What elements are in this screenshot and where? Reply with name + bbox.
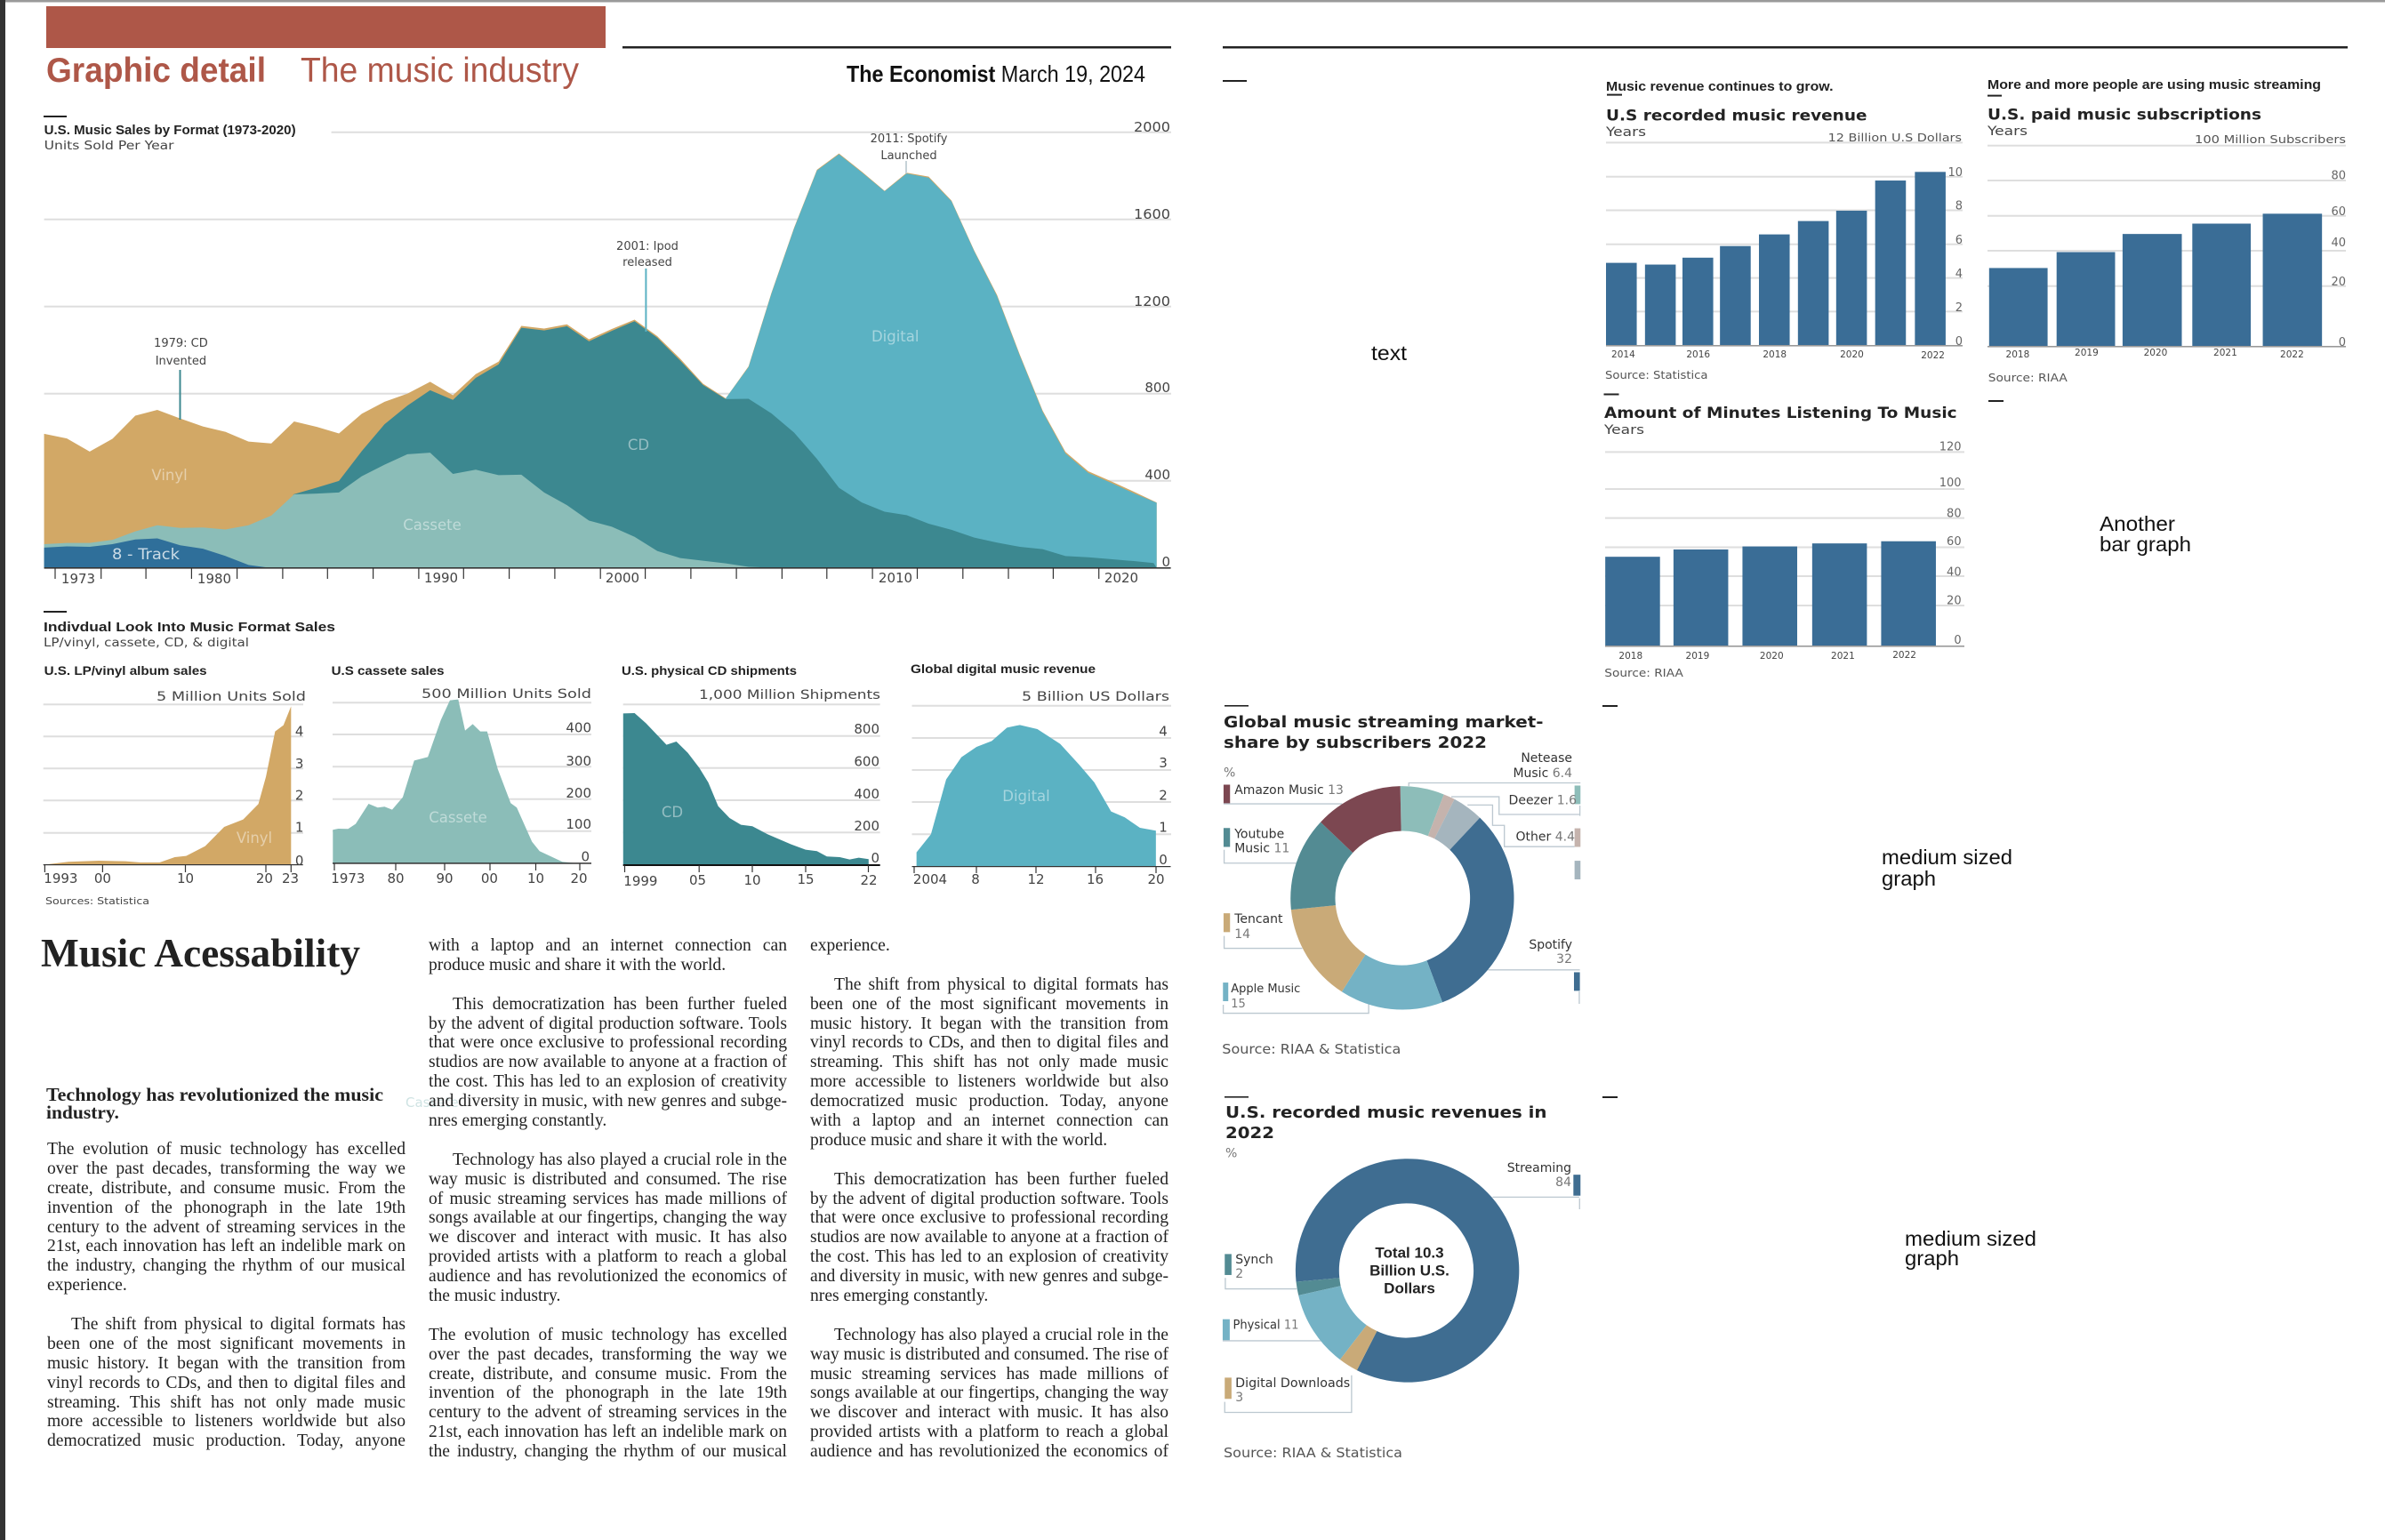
panel: US recorded music revenue bars: 12 Billion U.S Dollars <box>1828 131 1962 144</box>
center total <box>1369 1245 1449 1296</box>
y axis labels: 1600 <box>1134 206 1170 222</box>
chart: CD shipments: U.S. physical CD shipments <box>622 663 797 678</box>
panel: US recorded music revenue bars: 2016 <box>1686 349 1710 360</box>
kicker: Music revenue continues to grow. <box>1606 79 1834 94</box>
article column 2: by the advent of digital production software. Tools <box>429 1015 787 1033</box>
article column 2: we discover and interact with music. It has also <box>429 1228 787 1247</box>
annotation: Spotify launched: Launched <box>880 149 937 163</box>
article subheading: industry. <box>46 1102 119 1123</box>
chart: vinyl sales: 00 <box>94 870 111 886</box>
panel: US paid subscriptions bars: 80 <box>2331 170 2346 183</box>
legend labels: 15 <box>1231 998 1246 1011</box>
article column 1: experience. <box>47 1276 127 1295</box>
article column 3: the cost. This has led to an explosion of creativity <box>810 1247 1168 1266</box>
chart: digital revenue: 8 <box>971 871 980 887</box>
chart: CD shipments: 05 <box>689 872 706 888</box>
annotation: CD invented <box>154 337 208 420</box>
chart: vinyl sales: Vinyl <box>237 830 272 846</box>
article column 3: songs available at our fingertips, changing the way <box>810 1384 1168 1402</box>
article column 1: the industry, changing the rhythm of our musical <box>47 1256 406 1275</box>
legend labels: Music 6.4 <box>1513 766 1572 781</box>
annotation: CD invented: Invented <box>156 355 206 368</box>
area labels: Vinyl <box>151 467 188 484</box>
chart: cassette sales: 500 Million Units Sold <box>422 687 591 702</box>
panel: US recorded music revenue bars <box>1605 79 1963 381</box>
x axis labels: 1980 <box>197 571 231 587</box>
placeholder block: medium sized graph 2: graph <box>1905 1247 1959 1270</box>
article column 2: invention of the phonograph in the late 19th <box>429 1384 787 1402</box>
article column 3: democratized music production. Today, anyone <box>810 1092 1168 1111</box>
chart: CD shipments: 0 <box>871 850 879 866</box>
chart: vinyl sales: 4 <box>295 724 303 740</box>
panel: US paid subscriptions bars: 20 <box>2331 276 2346 289</box>
article column 3: Technology has also played a crucial role in the <box>834 1326 1168 1344</box>
heading: Global music streaming market- <box>1224 713 1544 732</box>
chart: vinyl sales: 10 <box>177 870 194 886</box>
chart: digital revenue: 2 <box>1159 788 1168 804</box>
article heading: Music Acessability <box>41 931 360 975</box>
chart: digital revenue <box>911 662 1171 887</box>
area labels: Digital <box>871 328 919 345</box>
article column 1: invention of the phonograph in the late 19th <box>47 1199 406 1217</box>
article column 2: the cost. This has led to an explosion of creativity <box>429 1072 787 1091</box>
legend labels: Spotify <box>1529 938 1572 952</box>
panel: US paid subscriptions bars: More and more people are using music streaming <box>1988 77 2321 92</box>
chart: cassette sales: 400 <box>566 720 591 736</box>
chart: cassette sales <box>331 663 591 886</box>
article column 1: vinyl records to CDs, and then to digital files and <box>47 1374 406 1392</box>
legend labels: 32 <box>1556 952 1572 967</box>
panel: US paid subscriptions bars: 2018 <box>2006 349 2029 360</box>
legend labels: 3 <box>1235 1391 1243 1405</box>
article column 2: of music streaming services has made millions of <box>429 1190 787 1208</box>
article column 3 <box>810 936 1168 1461</box>
donut chart and leaders <box>1223 1159 1580 1413</box>
source: Source: Statistica <box>1605 369 1707 381</box>
article column 3: streaming. This shift has not only made music <box>810 1053 1168 1071</box>
article column 2: This democratization has been further fueled <box>453 995 787 1014</box>
area labels <box>112 328 919 563</box>
article column 2: the music industry. <box>429 1287 560 1305</box>
article column 2: provided artists with a platform to reach a global <box>429 1247 787 1266</box>
panel: US recorded music revenue bars: 2 <box>1955 301 1963 315</box>
placeholder block: another bar graph: bar graph <box>2100 533 2191 556</box>
section heading: Indivdual Look Into Music Format Sales <box>44 620 335 635</box>
panel: US paid subscriptions bars: 2022 <box>2280 349 2304 360</box>
panel: US recorded music revenue bars: 2020 <box>1840 349 1864 360</box>
placeholder block: another bar graph: Another <box>2100 512 2175 535</box>
legend labels: 84 <box>1555 1175 1571 1190</box>
panel: US recorded music revenue bars: Years <box>1605 125 1646 140</box>
chart: CD shipments: 200 <box>854 818 879 834</box>
panel: minutes listening bars: 40 <box>1947 566 1962 580</box>
y axis labels: 400 <box>1144 467 1170 483</box>
chart: cassette sales: 20 <box>570 870 588 886</box>
panel: streaming market share donut <box>1222 705 1580 1057</box>
chart subtitle: Units Sold Per Year <box>44 140 174 153</box>
chart: digital revenue: 4 <box>1159 724 1168 740</box>
panel: minutes listening bars: 0 <box>1954 634 1962 647</box>
article column 3: experience. <box>810 936 890 955</box>
chart: CD shipments: 15 <box>797 871 815 887</box>
publication and date: The Economist March 19, 2024 <box>847 60 1145 87</box>
panel: minutes listening bars: Amount of Minutes Listening To Music <box>1604 405 1957 421</box>
legend labels: Streaming <box>1507 1161 1571 1175</box>
article column 1: create, distribute, and consume music. From the <box>47 1179 406 1198</box>
article column 2: produce music and share it with the world. <box>429 956 726 975</box>
placeholder block: medium sized graph: graph <box>1882 867 1936 890</box>
panel: US paid subscriptions bars <box>1987 77 2346 384</box>
legend labels: Netease <box>1521 751 1572 766</box>
x axis labels: 1990 <box>424 570 458 586</box>
panel: minutes listening bars: 2019 <box>1686 651 1709 662</box>
panel: minutes listening bars: 100 <box>1939 477 1962 490</box>
chart: vinyl sales: 0 <box>295 853 303 869</box>
bars <box>1989 213 2322 347</box>
legend labels <box>1233 1161 1571 1405</box>
legend labels: Deezer 1.6 <box>1509 793 1577 807</box>
placeholder block: another bar graph <box>1988 400 2191 556</box>
bars <box>1605 541 1936 646</box>
heading: U.S. recorded music revenues in <box>1225 1103 1547 1122</box>
article subheading <box>46 1084 383 1123</box>
article column 2: 21st, each innovation has left an indelible mark on <box>429 1423 787 1441</box>
chart: digital revenue: 20 <box>1147 871 1165 887</box>
source: Source: RIAA & Statistica <box>1224 1445 1402 1461</box>
article column 1: more accessible to listeners worldwide but also <box>47 1412 406 1431</box>
article column 1: century to the advent of streaming services in the <box>47 1218 406 1237</box>
article column 2: with a laptop and an internet connection can <box>429 936 787 955</box>
legend labels: Amazon Music 13 <box>1234 783 1344 798</box>
stacked areas <box>44 154 1157 568</box>
red banner <box>46 6 606 48</box>
article column 3: provided artists with a platform to reach a global <box>810 1423 1168 1441</box>
chart: vinyl sales: 23 <box>282 870 299 886</box>
panel: US paid subscriptions bars: 100 Million Subscribers <box>2195 132 2346 146</box>
chart heading: U.S recorded music revenue <box>1606 108 1867 124</box>
panel: US paid subscriptions bars: 0 <box>2339 336 2346 349</box>
x axis labels: 2000 <box>606 570 639 586</box>
placeholder block: medium sized graph 2: medium sized <box>1905 1227 2036 1250</box>
header rule <box>622 46 1171 48</box>
article column 2: nres emerging constantly. <box>429 1111 606 1130</box>
article column 3: by the advent of digital production software. Tools <box>810 1190 1168 1208</box>
x axis labels: 2010 <box>879 570 912 586</box>
placeholder block: medium sized graph 2 <box>1602 1096 2036 1270</box>
chart: cassette sales: 00 <box>481 870 498 886</box>
chart: CD shipments: 400 <box>854 786 879 802</box>
article column 3: been one of the most significant movements in <box>810 995 1168 1014</box>
panel: minutes listening bars: 2020 <box>1760 651 1784 662</box>
panel: US recorded music revenue bars: 2014 <box>1611 349 1635 360</box>
chart: cassette sales: 100 <box>566 816 591 832</box>
chart: digital revenue: Digital <box>1002 788 1050 805</box>
panel: US recorded music revenue bars: 0 <box>1955 335 1963 349</box>
legend labels: Youtube <box>1233 827 1284 841</box>
y axis labels: 0 <box>1161 554 1170 570</box>
article column 3: and diversity in music, with new genres and subge- <box>810 1267 1168 1286</box>
panel: minutes listening bars: Source: RIAA <box>1604 667 1684 679</box>
article column 1: The shift from physical to digital formats has <box>71 1315 406 1334</box>
panel: streaming market share donut: share by subscribers 2022 <box>1224 734 1487 752</box>
legend labels: Music 11 <box>1234 841 1289 855</box>
x axis labels: 1973 <box>61 571 95 587</box>
chart: vinyl sales: 5 Million Units Sold <box>157 690 306 704</box>
chart: CD shipments: 1999 <box>623 873 657 889</box>
placeholder block: medium sized graph: medium sized <box>1882 846 2012 869</box>
panel: main stacked area chart <box>44 116 1171 587</box>
chart: cassette sales: Cassete <box>429 809 487 826</box>
article column 2: and diversity in music, with new genres and subge- <box>429 1092 787 1111</box>
chart: CD shipments: 1,000 Million Shipments <box>699 688 880 702</box>
article column 3: more accessible to listeners worldwide but also <box>810 1072 1168 1091</box>
chart: digital revenue: 1 <box>1159 820 1168 836</box>
article column 2: create, distribute, and consume music. From the <box>429 1365 787 1384</box>
placeholder block: text: text <box>1371 341 1408 365</box>
panel: streaming market share donut: % <box>1224 766 1235 781</box>
chart: CD shipments: 800 <box>854 721 879 737</box>
article column 2: audience and has revolutionized the economics of <box>429 1267 787 1286</box>
article column 2: that were once exclusive to professional recording <box>429 1033 787 1052</box>
area labels: 8 - Track <box>112 546 180 563</box>
article column 2: studios are now available to anyone at a fraction of <box>429 1053 787 1071</box>
legend labels: Other 4.4 <box>1516 830 1575 845</box>
article subheading: Technology has revolutionized the music <box>46 1084 383 1105</box>
panel: minutes listening bars: 2022 <box>1892 650 1916 661</box>
panel: US recorded music revenue bars: 4 <box>1955 268 1963 281</box>
article column 3: music streaming services has made millions of <box>810 1365 1168 1384</box>
header <box>46 6 1171 90</box>
chart: digital revenue: 12 <box>1027 871 1045 887</box>
article column 1: music history. It began with the transition from <box>47 1354 406 1373</box>
panel: US recorded revenues donut: 2022 <box>1225 1124 1274 1143</box>
panel: minutes listening bars: 2018 <box>1618 651 1642 662</box>
annotation: Ipod released: released <box>622 256 672 269</box>
panel: US paid subscriptions bars: 2021 <box>2213 348 2237 358</box>
panel: minutes listening bars: 2021 <box>1831 651 1855 662</box>
panel: US recorded music revenue bars: 8 <box>1955 200 1963 213</box>
panel: US recorded music revenue bars: 2022 <box>1921 350 1945 361</box>
donut chart and leaders <box>1223 783 1580 1014</box>
chart: digital revenue: 16 <box>1087 871 1104 887</box>
legend labels <box>1231 751 1577 1011</box>
y axis labels: 2000 <box>1134 119 1170 135</box>
article column 3: that were once exclusive to professional recording <box>810 1208 1168 1227</box>
center total: Billion U.S. <box>1369 1263 1449 1279</box>
chart: CD shipments: 22 <box>860 872 878 888</box>
area labels: CD <box>628 437 649 453</box>
panel: US recorded music revenue bars: 10 <box>1947 166 1963 180</box>
annotation: Ipod released <box>616 240 679 332</box>
chart: CD shipments <box>622 663 880 889</box>
article column 1: been one of the most significant movements in <box>47 1335 406 1353</box>
chart: cassette sales: U.S cassete sales <box>332 663 445 678</box>
article column 3: way music is distributed and consumed. The rise of <box>810 1345 1168 1364</box>
right header rule <box>1223 46 2348 48</box>
article column 1: streaming. This shift has not only made music <box>47 1393 406 1412</box>
article column 2: Technology has also played a crucial role in the <box>453 1151 787 1169</box>
chart: digital revenue: 5 Billion US Dollars <box>1022 690 1169 704</box>
article column 3: nres emerging constantly. <box>810 1287 988 1305</box>
panel: US paid subscriptions bars: U.S. paid music subscriptions <box>1988 107 2261 124</box>
title: the music industry: The music industry <box>301 52 579 90</box>
article column 3: vinyl records to CDs, and then to digital files and <box>810 1033 1168 1052</box>
panel: US paid subscriptions bars: 2020 <box>2144 348 2167 358</box>
panel: US paid subscriptions bars: Years <box>1987 124 2028 139</box>
x axis and ticks <box>44 567 1171 579</box>
panel: US recorded revenues donut: % <box>1225 1147 1237 1161</box>
chart: digital revenue: 0 <box>1159 852 1168 868</box>
panel: individual format sales <box>44 611 1171 907</box>
article column 3: studios are now available to anyone at a fraction of <box>810 1228 1168 1247</box>
chart title: U.S. Music Sales by Format (1973-2020) <box>44 123 296 138</box>
chart: CD shipments: CD <box>662 804 683 821</box>
chart: CD shipments: 600 <box>854 754 879 770</box>
article column 2: The evolution of music technology has excelled <box>429 1326 787 1344</box>
x axis labels <box>61 570 1138 587</box>
chart: cassette sales: 80 <box>387 870 405 886</box>
panel: US paid subscriptions bars: 2019 <box>2075 348 2099 358</box>
chart: digital revenue: 2004 <box>913 871 947 887</box>
chart: cassette sales: 90 <box>436 870 454 886</box>
article column 3: audience and has revolutionized the economics of <box>810 1442 1168 1461</box>
chart: cassette sales: 10 <box>527 870 544 886</box>
panel: minutes listening bars: 20 <box>1947 595 1962 608</box>
chart: vinyl sales <box>44 663 306 886</box>
legend labels: Digital Downloads <box>1235 1376 1350 1391</box>
annotation: CD invented: 1979: CD <box>154 337 208 350</box>
chart: digital revenue: 3 <box>1159 755 1168 771</box>
article column 1: The evolution of music technology has excelled <box>47 1140 406 1159</box>
article column 3: produce music and share it with the world. <box>810 1131 1107 1150</box>
x axis labels: 2020 <box>1104 570 1138 586</box>
legend labels: Apple Music <box>1231 983 1300 996</box>
panel: US recorded revenues donut <box>1223 1096 1580 1461</box>
article column 3: with a laptop and an internet connection can <box>810 1111 1168 1130</box>
article column 1: democratized music production. Today, anyone <box>47 1432 406 1450</box>
article column 2 <box>429 936 788 1461</box>
annotation: Ipod released: 2001: Ipod <box>616 240 679 253</box>
legend labels: 2 <box>1235 1267 1243 1281</box>
panel: minutes listening bars: 120 <box>1939 441 1962 454</box>
center total: Total 10.3 <box>1375 1245 1444 1261</box>
chart: cassette sales: 300 <box>566 753 591 769</box>
y axis labels <box>1134 119 1170 570</box>
annotation: Spotify launched: 2011: Spotify <box>871 132 948 146</box>
legend labels: Tencant <box>1233 912 1283 926</box>
article column 2: the industry, changing the rhythm of our musical <box>429 1442 787 1461</box>
chart: vinyl sales: 1993 <box>44 870 77 886</box>
chart: vinyl sales: 1 <box>295 820 303 836</box>
title: graphic detail: Graphic detail <box>46 52 266 90</box>
y axis labels: 800 <box>1144 380 1170 396</box>
chart: cassette sales: 1973 <box>331 870 365 886</box>
panel: minutes listening bars: 60 <box>1947 535 1962 549</box>
panel: US paid subscriptions bars: Source: RIAA <box>1988 372 2068 384</box>
article column 1 <box>47 1140 406 1450</box>
article column 3: music history. It began with the transition from <box>810 1015 1168 1033</box>
panel: US recorded music revenue bars: 6 <box>1955 234 1963 247</box>
y axis labels: 1200 <box>1134 293 1170 309</box>
article column 3: This democratization has been further fueled <box>834 1170 1168 1189</box>
placeholder block: medium sized graph <box>1602 705 2012 890</box>
chart: CD shipments: 10 <box>743 872 761 888</box>
section heading: LP/vinyl, cassete, CD, & digital <box>44 637 249 650</box>
panel: minutes listening bars: 80 <box>1947 508 1962 521</box>
panel: US recorded music revenue bars: 2018 <box>1763 349 1787 360</box>
panel: minutes listening bars: Years <box>1603 423 1644 437</box>
annotation: Spotify launched <box>871 132 948 173</box>
legend labels: Physical 11 <box>1233 1318 1298 1332</box>
article column 3: The shift from physical to digital formats has <box>834 975 1168 994</box>
center total: Dollars <box>1384 1280 1435 1296</box>
ghost label: Cassete <box>406 1095 459 1111</box>
source: small multiples: Sources: Statistica <box>45 895 149 907</box>
bars <box>1606 172 1946 346</box>
legend labels: 14 <box>1234 927 1250 942</box>
chart: vinyl sales: 2 <box>295 788 303 804</box>
article column 2: way music is distributed and consumed. The rise <box>429 1170 787 1189</box>
chart: cassette sales: 0 <box>581 848 590 864</box>
article column 2: century to the advent of streaming services in the <box>429 1403 787 1422</box>
panel: US paid subscriptions bars: 60 <box>2331 205 2346 219</box>
chart: vinyl sales: U.S. LP/vinyl album sales <box>44 663 207 678</box>
area labels: Cassete <box>403 517 462 533</box>
panel: US paid subscriptions bars: 40 <box>2331 237 2346 250</box>
article column 1: 21st, each innovation has left an indelible mark on <box>47 1237 406 1255</box>
chart: digital revenue: Global digital music revenue <box>911 662 1096 676</box>
source: Source: RIAA & Statistica <box>1222 1041 1401 1057</box>
legend labels: Synch <box>1235 1253 1273 1267</box>
article column 1: over the past decades, transforming the way we <box>47 1159 406 1178</box>
chart: vinyl sales: 3 <box>295 756 303 772</box>
chart: vinyl sales: 20 <box>256 870 273 886</box>
chart: cassette sales: 200 <box>566 785 591 801</box>
article column 2: over the past decades, transforming the way we <box>429 1345 787 1364</box>
article column 3: we discover and interact with music. It has also <box>810 1403 1168 1422</box>
article column 2: songs available at our fingertips, changing the way <box>429 1208 787 1227</box>
section heading <box>44 611 335 650</box>
panel: minutes listening bars <box>1603 393 1964 679</box>
